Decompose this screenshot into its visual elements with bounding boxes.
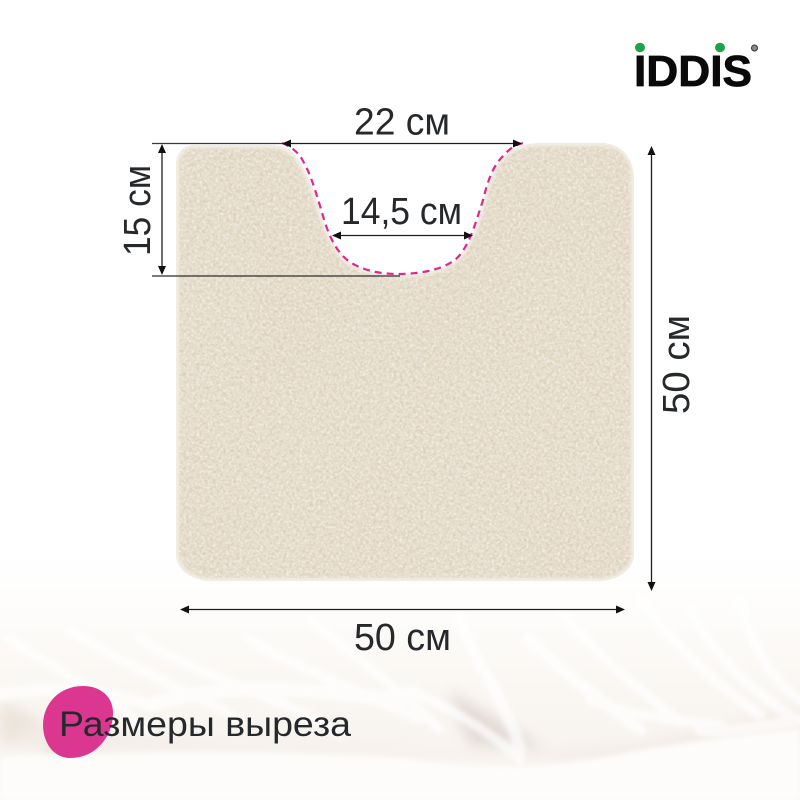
dimension: 14,5 cm inner width: 14,5 см — [341, 191, 462, 233]
logo: IDDIS: IDDIS — [634, 47, 752, 96]
icon: pink blob — [43, 686, 113, 758]
dimension: 50 cm height: 50 см — [656, 315, 698, 414]
dimension: 15 cm depth: 15 см — [117, 165, 159, 256]
dimension: 22 cm width: 22 см — [354, 102, 450, 144]
dimension: 22 cm width — [152, 102, 522, 148]
dimension: 15 cm depth — [117, 144, 400, 276]
dimension: 50 cm height — [648, 146, 698, 591]
heading with pink blob — [43, 686, 352, 758]
heading with pink blob: Размеры выреза — [59, 705, 352, 744]
dimension: 50 cm width — [180, 606, 625, 659]
mat with U-shaped cutout — [170, 140, 640, 585]
dimension: 50 cm width: 50 см — [354, 617, 451, 659]
dashed outline of the cutout — [282, 143, 523, 274]
